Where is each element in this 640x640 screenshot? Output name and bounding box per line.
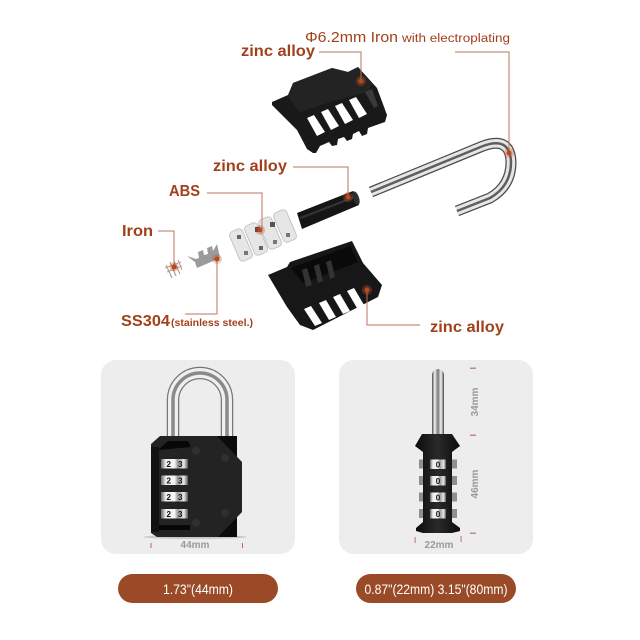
number windows: 2 [166, 460, 172, 469]
number windows [430, 460, 446, 519]
upper housing [272, 67, 387, 153]
shackle part [371, 143, 511, 211]
number windows: 2 [166, 493, 172, 502]
callout: shackle material [305, 30, 514, 158]
dimension: height marks: 34mm [470, 387, 481, 416]
dimension: height marks: 46mm [470, 469, 481, 498]
number windows: 0 [436, 460, 441, 470]
callout: zinc alloy middle: zinc alloy [213, 158, 287, 175]
callout: Iron [122, 223, 178, 272]
callout: ABS: ABS [169, 183, 200, 200]
dimension: 44mm: 44mm [181, 540, 210, 551]
callout: SS304 [121, 254, 253, 330]
dimension: 22mm [414, 536, 462, 551]
metal plate [187, 244, 220, 268]
small spring part [165, 260, 182, 278]
number wheels [228, 209, 298, 262]
cylinder part [297, 190, 361, 229]
callout: ABS [169, 183, 265, 235]
number windows [161, 459, 188, 519]
lower housing [268, 241, 382, 330]
pill: width: 1.73"(44mm) [163, 581, 233, 597]
number windows: 3 [178, 493, 183, 502]
number windows: 3 [178, 476, 183, 486]
pill: width [118, 574, 278, 603]
callout: Iron: Iron [122, 223, 153, 240]
callout: SS304: SS304 [121, 313, 170, 330]
panel: front view [101, 360, 295, 554]
number windows: 2 [166, 510, 172, 519]
number windows: 3 [178, 510, 183, 519]
number windows: 3 [178, 460, 183, 469]
callout: zinc alloy bottom: zinc alloy [430, 319, 504, 336]
callout: zinc alloy top: zinc alloy [241, 43, 315, 60]
icon: side padlock [415, 369, 460, 533]
number windows: 0 [436, 494, 441, 502]
number windows: 0 [436, 477, 441, 486]
dimension: 22mm: 22mm [425, 540, 454, 551]
icon: front padlock [143, 373, 247, 539]
pill: depth and height [356, 574, 516, 603]
dimension: 44mm [150, 540, 243, 551]
panel: side view [339, 360, 533, 554]
callout: SS304: (stainless steel.) [171, 317, 253, 329]
pill: depth and height: 0.87"(22mm) 3.15"(80mm) [364, 581, 508, 597]
callout: shackle material: with electroplating [401, 33, 510, 45]
number windows: 2 [166, 476, 172, 486]
callout: shackle material: Φ6.2mm Iron [305, 30, 398, 46]
callout: zinc alloy middle [213, 158, 353, 202]
callout: zinc alloy top [241, 43, 366, 86]
number windows: 0 [436, 510, 441, 519]
dimension: height marks [470, 368, 481, 534]
callout: zinc alloy bottom [362, 285, 504, 336]
